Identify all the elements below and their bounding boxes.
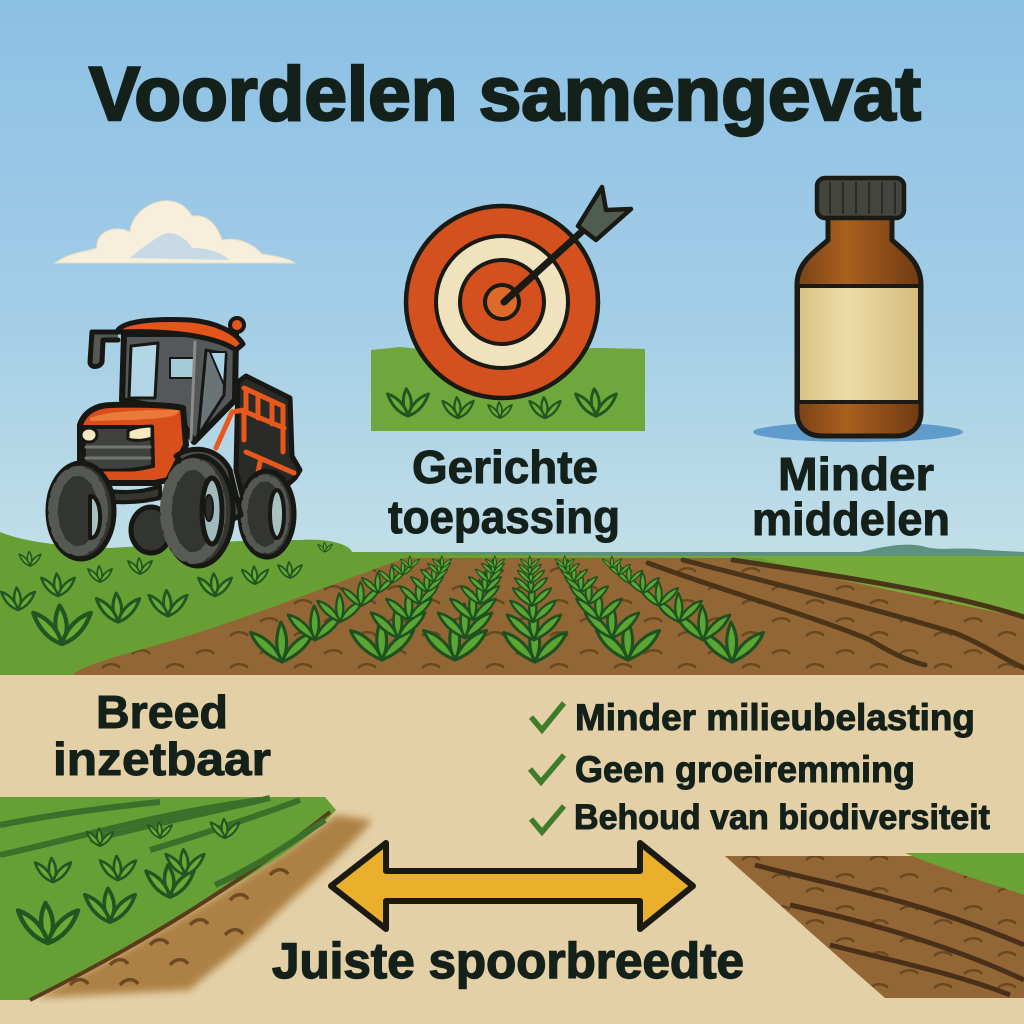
lower left field (0, 797, 336, 1000)
distant treeline (0, 545, 1024, 560)
label: Breed inzetbaar: Breed (96, 686, 228, 738)
cloud (55, 201, 295, 263)
plants on the left grass (1, 542, 332, 644)
roof (118, 319, 243, 350)
benefit: Minder milieubelasting: Minder milieubelasting (575, 697, 975, 738)
cab (122, 334, 236, 442)
hood (80, 405, 186, 483)
icon: target with arrow (406, 187, 631, 398)
label: Minder middelen: Minder (778, 448, 934, 500)
fender and large tyre (163, 449, 241, 566)
label: Gerichte toepassing (388, 441, 620, 543)
mirror (90, 332, 118, 366)
benefit: Geen groeiremming: Geen groeiremming (575, 749, 915, 790)
icon: red tractor (48, 318, 300, 566)
lower left soil strip (35, 815, 372, 998)
icon: bottle (753, 178, 963, 442)
lower right soil (725, 853, 1024, 998)
rack (236, 376, 300, 520)
title: Voordelen samengevat (89, 52, 921, 137)
label: Minder middelen (752, 448, 950, 545)
label: Breed inzetbaar (53, 686, 271, 785)
left front tyre (48, 463, 114, 559)
upper field: grass (0, 532, 1024, 680)
sky background (0, 0, 1024, 560)
sand band (0, 675, 1024, 1024)
benefit: Behoud van biodiversiteit: Behoud van biodiversiteit (574, 798, 990, 837)
far wheels (131, 471, 294, 557)
label: Minder middelen: middelen (752, 493, 950, 545)
label: Breed inzetbaar: inzetbaar (53, 733, 271, 785)
crop rows in the upper field (250, 556, 764, 662)
label: Juiste spoorbreedte: Juiste spoorbreedte (272, 933, 744, 989)
upper field: soil (72, 558, 1024, 680)
grass patch under target (371, 347, 645, 431)
label: Gerichte toepassing: toepassing (388, 491, 620, 543)
double arrow: track width (331, 843, 693, 929)
label: Gerichte toepassing: Gerichte (412, 441, 598, 493)
